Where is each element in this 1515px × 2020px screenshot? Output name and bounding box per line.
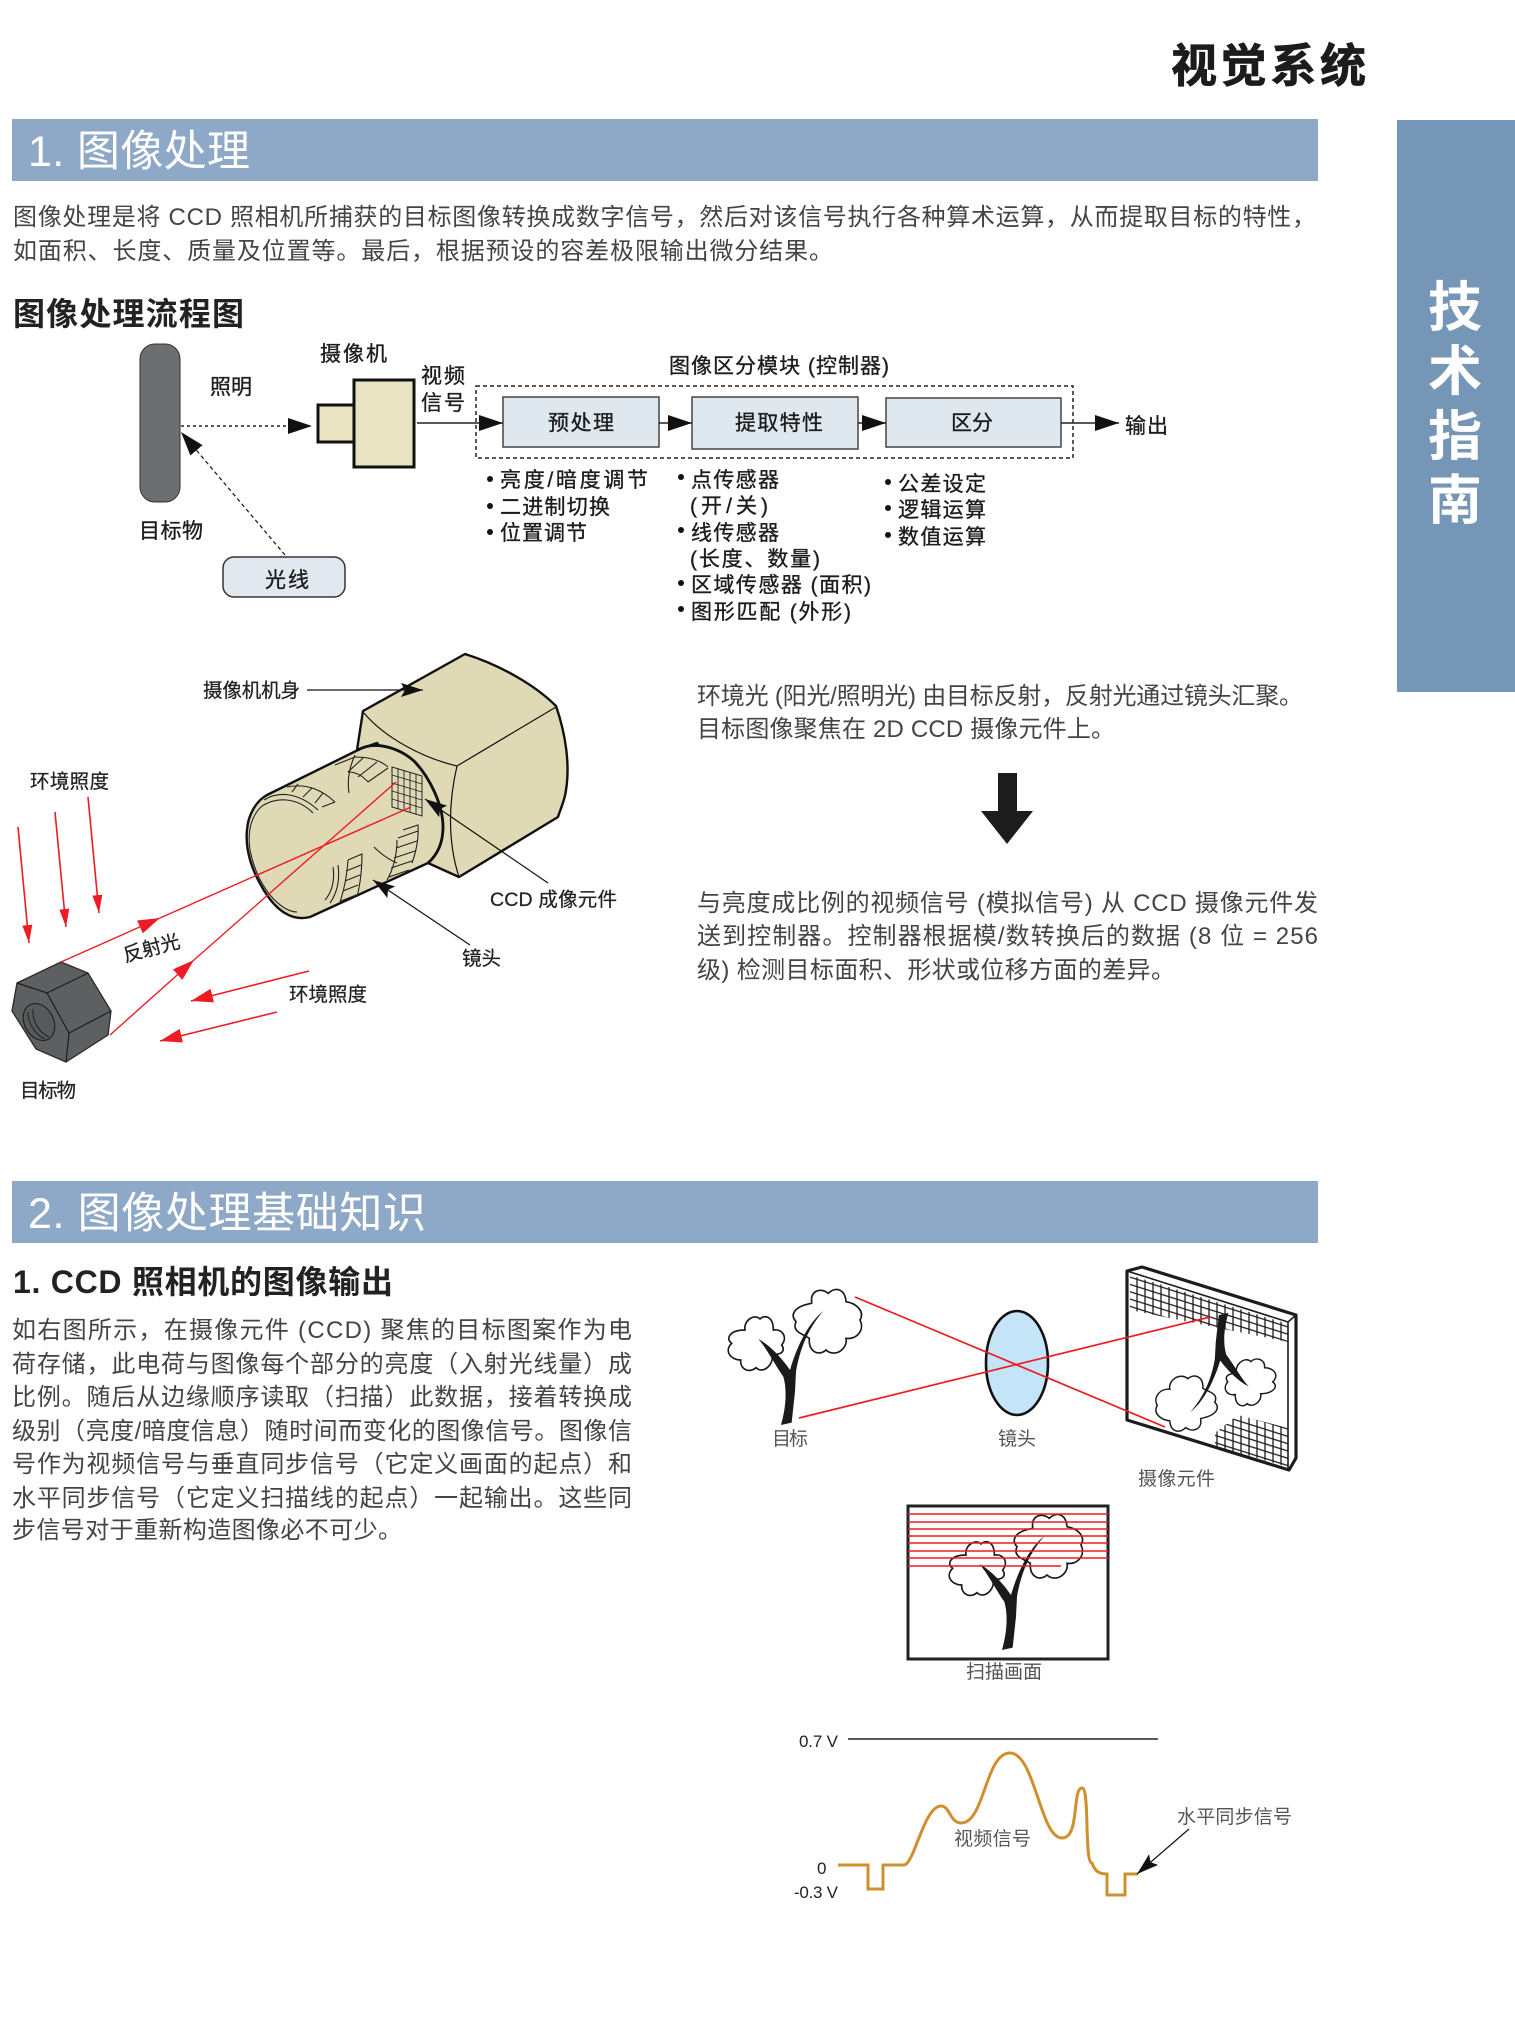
CCD paragraph: 级别（亮度/暗度信息）随时间而变化的图像信号。图像信 [12,1418,632,1445]
CCD paragraph: 荷存储，此电荷与图像每个部分的亮度（入射光线量）成 [12,1351,632,1378]
camera illustration [12,654,617,1102]
section header 2: 2. 图像处理基础知识 [28,1190,426,1238]
camera icon: 摄像机 [320,343,387,366]
intro paragraph: 如面积、长度、质量及位置等。最后，根据预设的容差极限输出微分结果。 [13,238,833,265]
CCD subheading: 1. CCD 照相机的图像输出 [13,1264,393,1300]
flow arrows [417,422,1119,424]
target tree [728,1290,861,1450]
camera labels: 环境照度 [30,771,109,793]
list: discrimination: 数值运算 [898,526,986,549]
waveform line [838,1753,1138,1895]
box: discrimination: 区分 [951,412,993,435]
camera labels: 摄像机机身 [203,680,300,702]
list: discrimination: 逻辑运算 [898,499,986,522]
axis labels [794,1732,839,1902]
ambient light arrows [18,797,309,1041]
side tab: technical guide: 指 [1428,407,1482,467]
flowchart [139,343,1168,624]
list: feature extraction: 线传感器 [691,522,779,545]
CCD paragraph: 如右图所示，在摄像元件 (CCD) 聚焦的目标图案作为电 [12,1317,632,1344]
camera body [357,654,568,877]
illumination label: 照明 [210,376,252,399]
scan frame [908,1506,1108,1683]
dashed arrow from light [181,432,285,555]
image sensor: 摄像元件 [1138,1468,1215,1490]
scan frame: 扫描画面 [966,1661,1042,1683]
CCD paragraph [12,1317,632,1544]
lens [986,1311,1048,1450]
camera labels: 环境照度 [289,984,367,1006]
list: preprocessing: 位置调节 [500,522,587,545]
camera icon [318,343,414,467]
video signal waveform: 视频信号 [954,1828,1031,1850]
box: feature extraction: 提取特性 [735,412,823,435]
image sensor [1127,1267,1296,1490]
light box [223,557,345,597]
flowchart heading: 图像处理流程图 [13,296,244,332]
explanation text bottom [697,890,1318,984]
section header 1: 1. 图像处理 [28,128,250,176]
list: feature extraction: 图形匹配 (外形) [691,601,851,624]
horizontal sync label: 水平同步信号 [1177,1806,1292,1828]
leader arrows [307,690,548,945]
CCD paragraph: 号作为视频信号与垂直同步信号（它定义画面的起点）和 [12,1451,632,1478]
list: preprocessing: 二进制切换 [500,496,610,519]
target tree: 目标 [772,1428,808,1450]
reflected light rays [61,782,411,1035]
target nut [12,962,111,1062]
list: feature extraction: 区域传感器 (面积) [691,574,871,597]
list: feature extraction: (长度、数量) [690,548,820,571]
target object bar: 目标物 [139,520,203,543]
video signal label: 视频 [421,365,465,388]
camera labels: CCD 成像元件 [490,889,617,911]
camera labels [20,680,617,1102]
axis labels: 0.7 V [799,1732,839,1751]
video signal waveform [794,1732,1292,1902]
output label: 输出 [1125,415,1168,438]
side tab: technical guide: 术 [1428,342,1482,402]
box: discrimination [886,398,1061,447]
target object bar [139,344,203,543]
list: preprocessing [487,469,648,545]
list: discrimination: 公差设定 [898,473,986,496]
CCD sensor grid [392,767,422,816]
explanation text bottom: 与亮度成比例的视频信号 (模拟信号) 从 CCD 摄像元件发 [697,890,1318,917]
discrimination module dashed frame: 图像区分模块 (控制器) [669,355,889,378]
intro paragraph: 图像处理是将 CCD 照相机所捕获的目标图像转换成数字信号，然后对该信号执行各种算术运算，从而提取目标的特性， [13,204,1316,231]
optics diagram [728,1267,1296,1490]
axis labels: 0 [817,1859,826,1878]
axis labels: -0.3 V [794,1883,839,1902]
list: discrimination [885,473,986,549]
box: preprocessing: 预处理 [548,412,614,435]
box: feature extraction [692,397,858,449]
list: preprocessing: 亮度/暗度调节 [500,469,648,492]
CCD paragraph: 步信号对于重新构造图像必不可少。 [12,1517,402,1544]
lens: 镜头 [998,1428,1036,1450]
camera labels: 反射光 [121,931,183,967]
side tab: technical guide: 南 [1428,471,1482,531]
explanation text top: 环境光 (阳光/照明光) 由目标反射，反射光通过镜头汇聚。 [697,683,1303,710]
explanation text top: 目标图像聚焦在 2D CCD 摄像元件上。 [697,716,1115,743]
scan lines [908,1514,1108,1566]
list: feature extraction: 点传感器 [691,469,779,492]
list: feature extraction: (开/关) [690,495,768,518]
explanation text bottom: 级) 检测目标面积、形状或位移方面的差异。 [697,957,1175,984]
horizontal sync label [1137,1806,1292,1874]
section header 2 [12,1181,1318,1243]
section header 1 [12,119,1318,181]
camera labels: 目标物 [20,1080,76,1102]
discrimination module dashed frame [476,355,1073,458]
red rays through lens [799,1297,1210,1427]
video signal label [421,365,465,415]
CCD paragraph: 比例。随后从边缘顺序读取（扫描）此数据，接着转换成 [12,1384,632,1411]
explanation text bottom: 送到控制器。控制器根据模/数转换后的数据 (8 位 = 256 [697,923,1318,950]
CCD paragraph: 水平同步信号（它定义扫描线的起点）一起输出。这些同 [12,1485,632,1512]
list: feature extraction [678,469,871,624]
light box: 光线 [265,569,309,592]
dotted light path to camera [181,425,312,427]
box: preprocessing [503,397,659,447]
side tab: technical guide: 技 [1428,278,1482,338]
side tab: technical guide [1397,120,1515,692]
lens barrel [247,746,443,918]
down arrow [981,773,1033,844]
title: 视觉系统 [1171,40,1366,92]
camera labels: 镜头 [462,948,501,970]
intro paragraph [13,204,1316,265]
explanation text top [697,683,1303,743]
video signal label: 信号 [421,392,465,415]
